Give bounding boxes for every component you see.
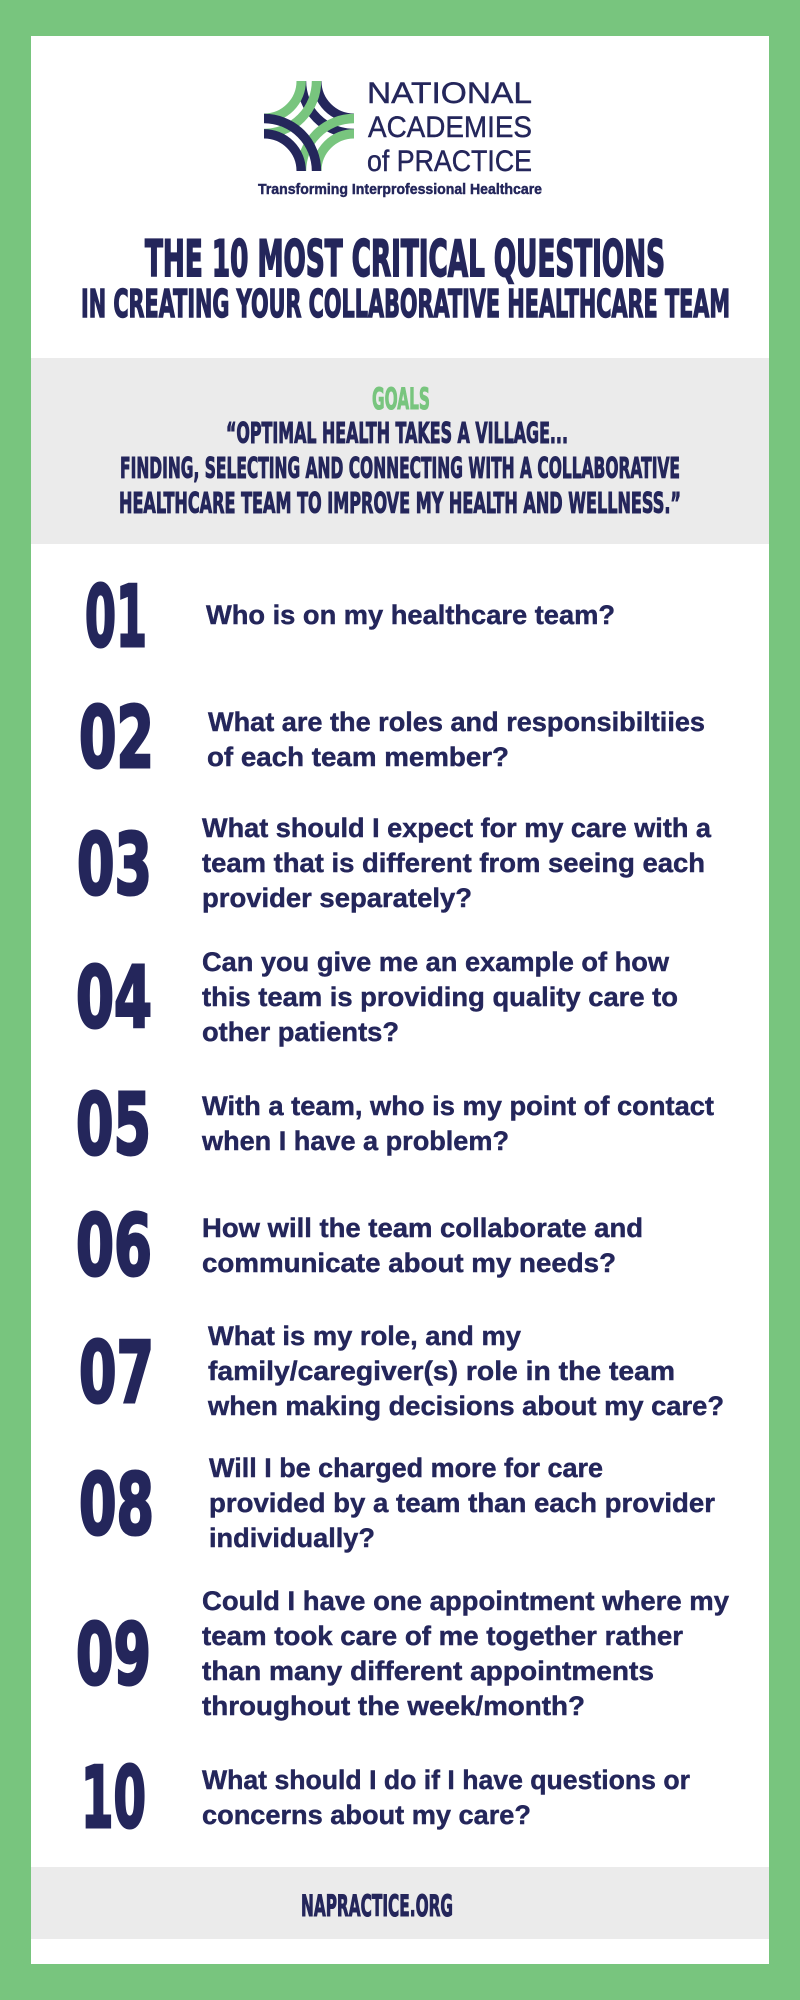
footer website: NAPRACTICE.ORG	[301, 1889, 453, 1923]
logo wordmark: ACADEMIES	[368, 111, 532, 144]
goals heading: GOALS	[372, 382, 430, 416]
number 05: 05	[76, 1076, 151, 1175]
number 01: 01	[85, 568, 147, 667]
number 04: 04	[76, 949, 152, 1048]
panel: goals	[31, 358, 769, 544]
question text 09: than many different appointments	[202, 1656, 654, 1686]
question 08	[79, 1453, 715, 1555]
logo: National Academies of Practice	[258, 77, 542, 198]
question text 07	[207, 1321, 724, 1421]
panel: footer	[31, 1867, 769, 1939]
question text 09: team took care of me together rather	[202, 1621, 683, 1651]
goals background	[31, 358, 769, 544]
number 07: 07	[79, 1324, 154, 1423]
logo wordmark	[367, 77, 532, 178]
number 09: 09	[76, 1606, 151, 1705]
question text 03: provider separately?	[202, 883, 472, 913]
question text 06: communicate about my needs?	[202, 1248, 616, 1278]
question text 09: throughout the week/month?	[202, 1691, 585, 1721]
question text 03: team that is different from seeing each	[202, 848, 705, 878]
question 07	[79, 1321, 724, 1423]
question text 10: What should I do if I have questions or	[202, 1765, 690, 1795]
question text 08	[209, 1453, 715, 1553]
question 09	[76, 1586, 729, 1721]
question text 02	[207, 707, 705, 772]
question text 10	[202, 1765, 690, 1830]
number 02: 02	[79, 689, 154, 788]
icon: interwoven arcs logo mark	[264, 81, 354, 171]
question text 07: when making decisions about my care?	[207, 1391, 724, 1421]
question text 03: What should I expect for my care with a	[202, 813, 712, 843]
number 06: 06	[76, 1197, 152, 1296]
question text 02: of each team member?	[207, 742, 509, 772]
question text 09	[202, 1586, 729, 1721]
question 05	[76, 1076, 714, 1175]
question 06	[76, 1197, 643, 1296]
question text 09: Could I have one appointment where my	[202, 1586, 729, 1616]
question text 08: Will I be charged more for care	[209, 1453, 603, 1483]
question 04	[76, 947, 678, 1048]
question text 01: Who is on my healthcare team?	[206, 600, 615, 630]
title	[81, 230, 730, 326]
question text 05	[201, 1091, 714, 1156]
question text 05: With a team, who is my point of contact	[202, 1091, 714, 1121]
question 02	[79, 689, 705, 788]
question text 06	[202, 1213, 643, 1278]
question text 04	[202, 947, 678, 1047]
question 01	[85, 568, 615, 667]
question text 02: What are the roles and responsibiltiies	[208, 707, 705, 737]
goals quote	[119, 417, 681, 520]
question text 10: concerns about my care?	[202, 1800, 531, 1830]
question text 04: this team is providing quality care to	[202, 982, 678, 1012]
question text 08: provided by a team than each provider	[209, 1488, 715, 1518]
footer background	[31, 1867, 769, 1939]
question text 07: family/caregiver(s) role in the team	[208, 1356, 675, 1386]
number 03: 03	[77, 816, 152, 915]
number 10: 10	[81, 1749, 146, 1848]
question text 04: other patients?	[202, 1017, 399, 1047]
number 08: 08	[79, 1456, 154, 1555]
question text 04: Can you give me an example of how	[202, 947, 670, 977]
question text 08: individually?	[209, 1523, 375, 1553]
logo wordmark: of PRACTICE	[367, 145, 532, 178]
logo wordmark: NATIONAL	[367, 77, 532, 110]
question 03	[77, 813, 712, 915]
question 10	[81, 1749, 690, 1848]
logo tagline: Transforming Interprofessional Healthcare	[258, 181, 542, 198]
question text 05: when I have a problem?	[201, 1126, 509, 1156]
question text 07: What is my role, and my	[208, 1321, 521, 1351]
question text 06: How will the team collaborate and	[202, 1213, 643, 1243]
question text 03	[202, 813, 712, 913]
